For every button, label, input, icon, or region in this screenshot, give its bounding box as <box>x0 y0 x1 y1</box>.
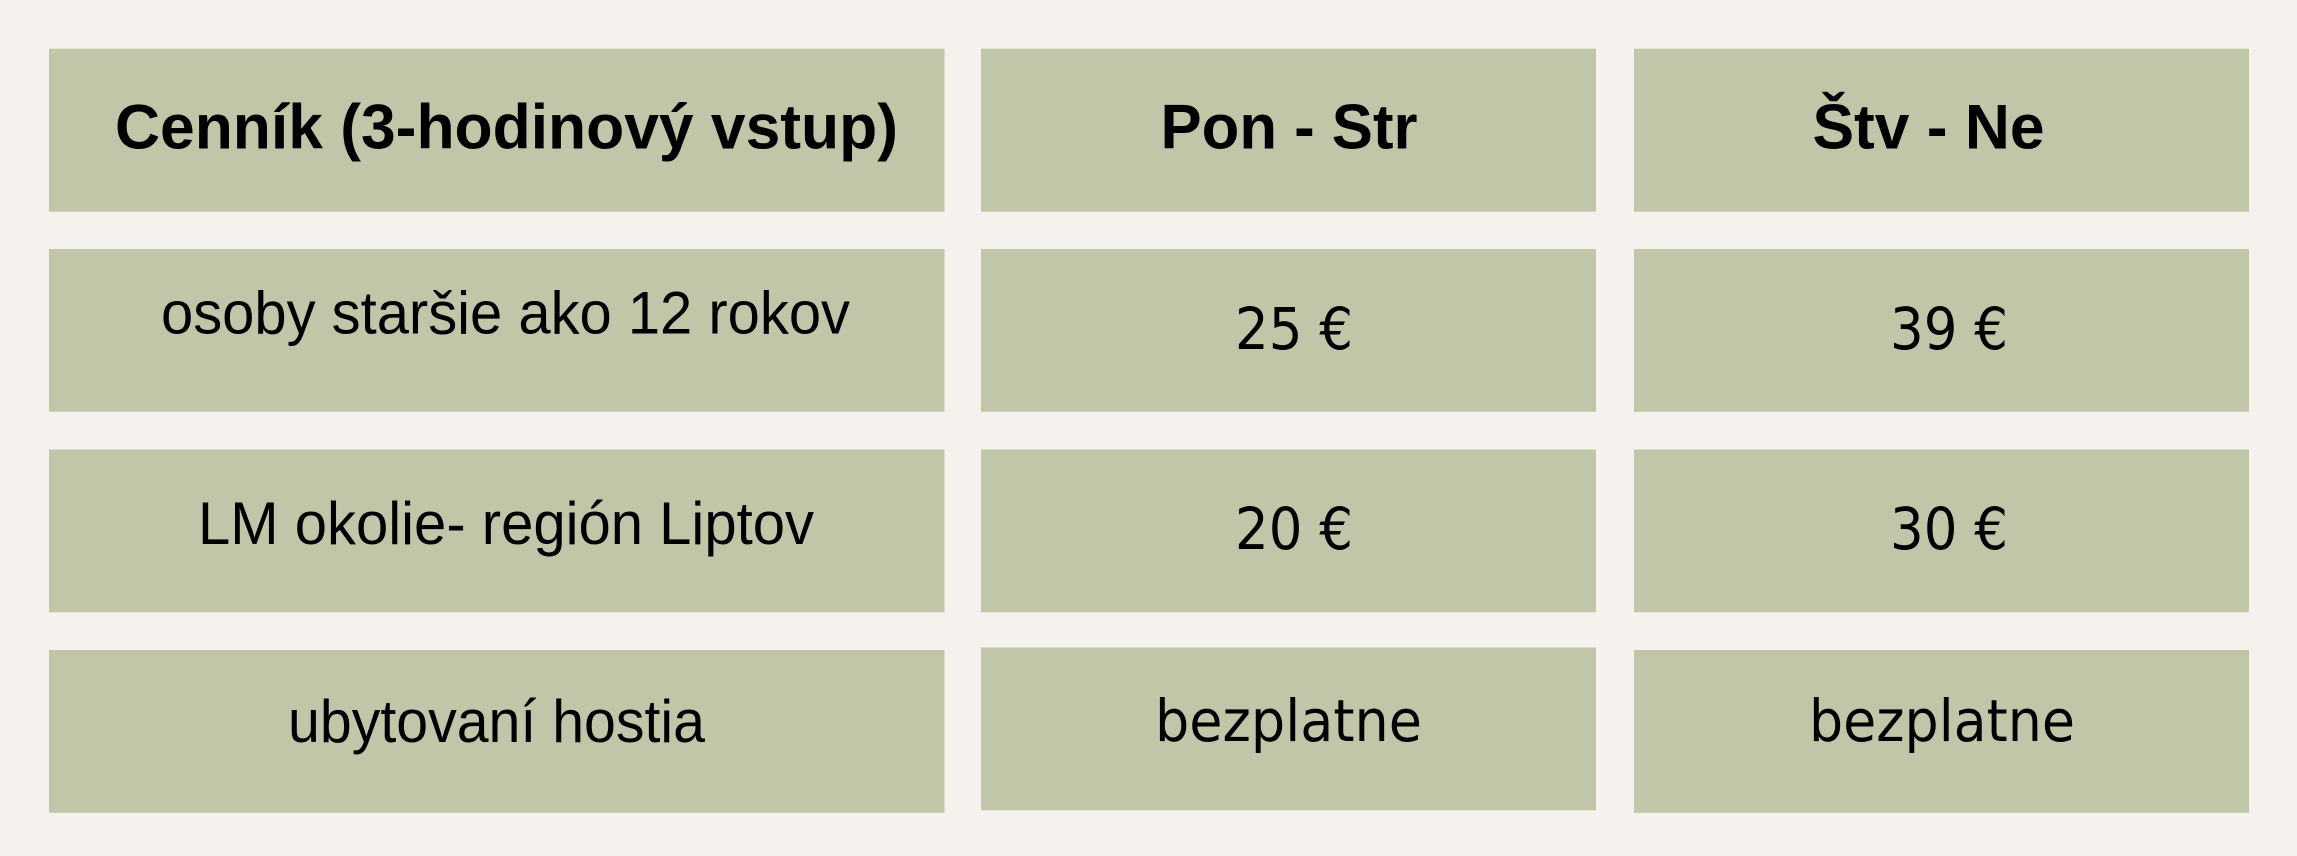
header cell: price list title <box>49 49 944 212</box>
row label: LM area: LM okolie- región Liptov <box>198 490 814 557</box>
header cell: Thursday to Sunday <box>1634 49 2249 212</box>
row: accommodated guests <box>49 648 2249 813</box>
price: 20 euro <box>981 450 1596 612</box>
price: 25 euro: 25 € <box>1235 295 1353 363</box>
price: 25 euro <box>981 249 1596 412</box>
header cell: Monday to Wednesday: Pon - Str <box>1160 92 1418 162</box>
header cell: price list title: Cenník (3-hodinový vstup) <box>115 92 898 162</box>
price: free, weekdays <box>981 648 1596 810</box>
row: persons over 12 years <box>49 249 2249 412</box>
row label: LM area <box>49 450 944 612</box>
header row <box>49 49 2249 212</box>
row label: accommodated guests <box>49 650 944 813</box>
price: free, weekend: bezplatne <box>1809 687 2075 755</box>
header cell: Thursday to Sunday: Štv - Ne <box>1812 92 2044 162</box>
price: 30 euro: 30 € <box>1890 495 2008 563</box>
row label: persons over 12: osoby staršie ako 12 rokov <box>161 280 850 346</box>
price: 30 euro <box>1634 450 2249 612</box>
price: 20 euro: 20 € <box>1235 495 1353 563</box>
header cell: Monday to Wednesday <box>981 49 1596 212</box>
row label: accommodated guests: ubytovaní hostia <box>288 688 706 755</box>
price: 39 euro <box>1634 249 2249 412</box>
price: 39 euro: 39 € <box>1890 295 2008 363</box>
price: free, weekend <box>1634 650 2249 813</box>
price: free, weekdays: bezplatne <box>1155 687 1422 755</box>
row: LM area and Liptov region <box>49 450 2249 612</box>
row label: persons over 12 <box>49 249 944 412</box>
